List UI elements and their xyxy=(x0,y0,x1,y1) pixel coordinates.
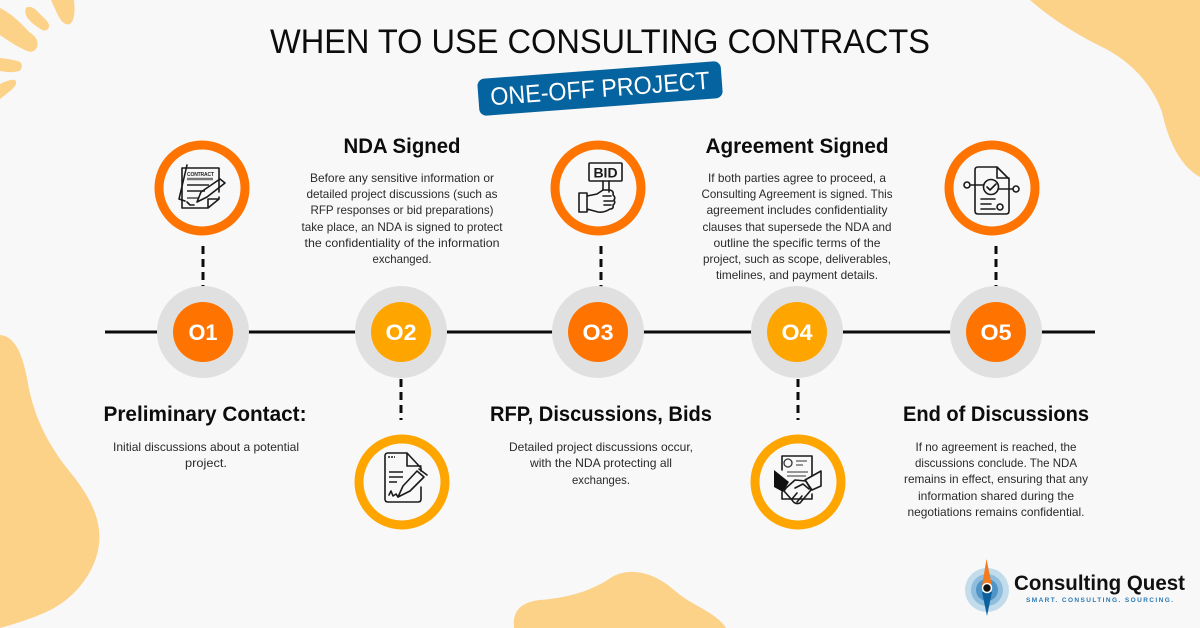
text: end of discussions: discussions conclude. The NDA xyxy=(915,456,1077,470)
text: NDA signed: Before any sensitive information or xyxy=(310,171,494,185)
text: agreement signed: timelines, and payment details. xyxy=(716,268,878,282)
text: end of discussions: If no agreement is reached, the xyxy=(916,440,1077,454)
icon: agreement document xyxy=(949,145,1035,231)
text: NDA signed: detailed project discussions (such as xyxy=(306,187,498,201)
text: NDA signed: NDA Signed xyxy=(344,135,460,158)
text: RFP, discussions, bids: Detailed project discussions occur, xyxy=(509,440,693,454)
text: RFP, discussions, bids: exchanges. xyxy=(572,473,630,487)
text: end of discussions xyxy=(903,403,1089,519)
step 01 node xyxy=(157,286,249,378)
icon: bid sign: BID xyxy=(593,164,618,180)
text: end of discussions: remains in effect, ensuring that any xyxy=(904,472,1088,486)
text: end of discussions: information shared during the xyxy=(918,489,1074,503)
subtitle badge: ONE-OFF PROJECT xyxy=(489,67,711,111)
step 03 node: O3 xyxy=(582,320,614,345)
text: agreement signed: clauses that supersede the NDA and xyxy=(702,220,892,234)
text: NDA signed: take place, an NDA is signed to protect xyxy=(302,220,503,234)
connector dashes xyxy=(203,246,996,420)
text: preliminary contact xyxy=(104,403,306,470)
icon: handshake xyxy=(755,439,841,525)
text: NDA signed xyxy=(302,135,503,266)
text: NDA signed: exchanged. xyxy=(372,252,432,266)
text: NDA signed: the confidentiality of the information xyxy=(304,236,500,250)
text: agreement signed xyxy=(702,135,892,282)
icon: bid sign xyxy=(555,145,641,231)
step 04 node: O4 xyxy=(782,320,813,345)
timeline line xyxy=(105,330,1095,334)
text: RFP, discussions, bids: RFP, Discussions, Bids xyxy=(490,403,712,426)
text: RFP, discussions, bids xyxy=(490,403,712,487)
text: end of discussions: negotiations remains confidential. xyxy=(908,505,1084,519)
text: agreement signed: If both parties agree to proceed, a xyxy=(708,171,886,185)
step 05 node: O5 xyxy=(980,320,1012,345)
title: WHEN TO USE CONSULTING CONTRACTS xyxy=(270,23,930,61)
icon: contract: CONTRACT xyxy=(187,172,214,178)
text: end of discussions: End of Discussions xyxy=(903,403,1089,426)
text: agreement signed: Consulting Agreement is signed. This xyxy=(702,187,892,201)
text: preliminary contact: Initial discussions about a potential xyxy=(113,440,299,454)
step 05 node xyxy=(950,286,1042,378)
logo xyxy=(965,559,1185,616)
text: agreement signed: project, such as scope, deliverables, xyxy=(703,252,891,266)
icon: signing document xyxy=(359,439,445,525)
logo: Consulting Quest xyxy=(1014,572,1185,595)
text: agreement signed: agreement includes confidentiality xyxy=(706,203,888,217)
step 02 node: O2 xyxy=(386,320,416,345)
logo: SMART. CONSULTING. SOURCING. xyxy=(1026,597,1173,604)
text: RFP, discussions, bids: with the NDA protecting all xyxy=(529,456,672,470)
icon: contract xyxy=(159,145,245,231)
step 04 node xyxy=(751,286,843,378)
step 02 node xyxy=(355,286,447,378)
text: preliminary contact: Preliminary Contact: xyxy=(104,403,306,426)
step 01 node: O1 xyxy=(188,320,218,345)
text: agreement signed: outline the specific terms of the xyxy=(714,236,881,250)
text: NDA signed: RFP responses or bid preparations) xyxy=(310,203,494,217)
text: agreement signed: Agreement Signed xyxy=(706,135,888,158)
text: preliminary contact: project. xyxy=(185,456,227,470)
step 03 node xyxy=(552,286,644,378)
